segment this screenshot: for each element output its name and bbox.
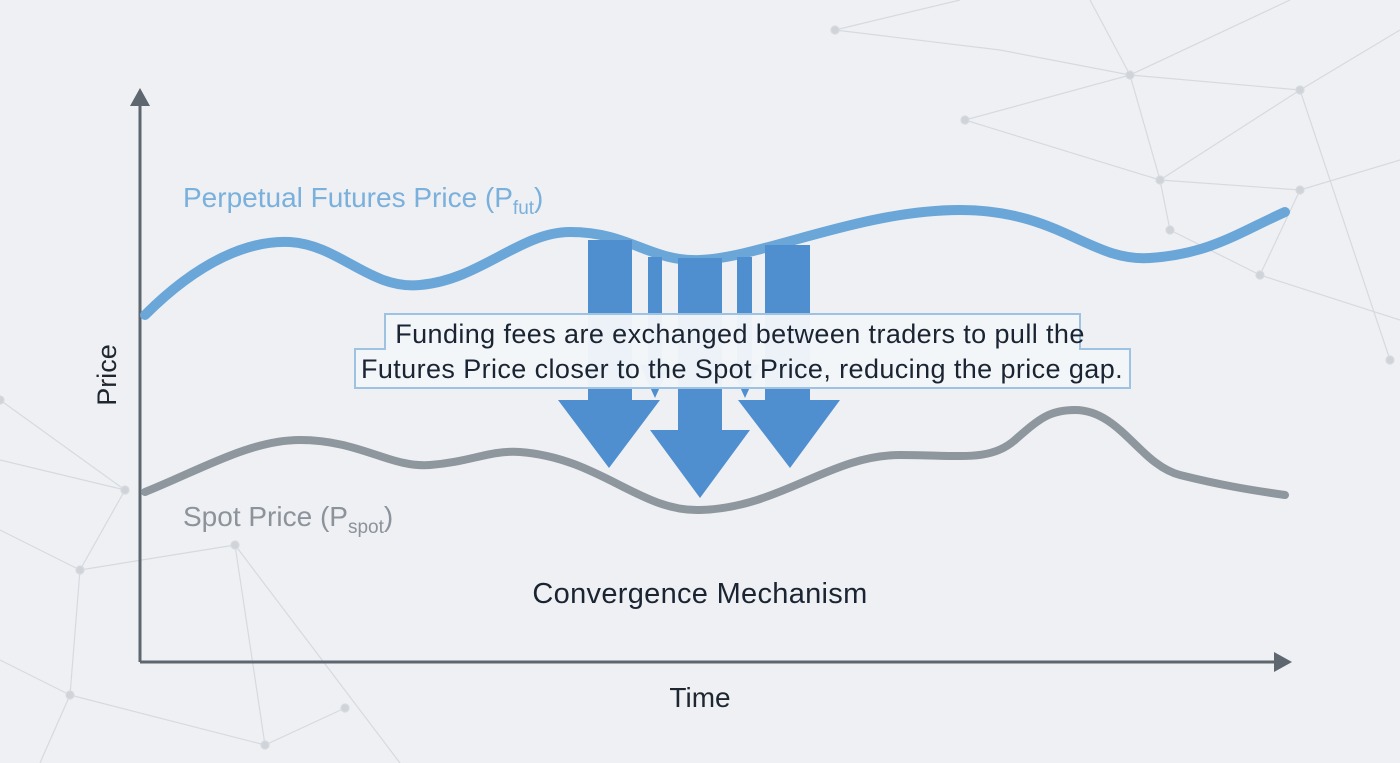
label: perpetual futures price: ) bbox=[534, 182, 543, 213]
callout bbox=[355, 314, 1130, 388]
label: perpetual futures price: Perpetual Futures Price (P bbox=[183, 182, 513, 213]
arrows: convergence bbox=[558, 240, 840, 498]
caption: convergence mechanism: Convergence Mechanism bbox=[532, 578, 868, 610]
line: spot price bbox=[145, 410, 1285, 510]
callout: Futures Price closer to the Spot Price, reducing the price gap. bbox=[361, 354, 1123, 384]
label: spot price: ) bbox=[384, 501, 393, 532]
label: spot price: Spot Price (P bbox=[183, 501, 348, 532]
axis label: Time: Time bbox=[669, 682, 731, 713]
label: perpetual futures price: fut bbox=[513, 198, 535, 219]
label: spot price: spot bbox=[348, 517, 385, 538]
callout: Funding fees are exchanged between traders to pull the bbox=[395, 319, 1085, 349]
axis label: Price: Price bbox=[92, 344, 122, 406]
axes bbox=[130, 88, 1292, 672]
line: perpetual futures price bbox=[145, 210, 1285, 315]
